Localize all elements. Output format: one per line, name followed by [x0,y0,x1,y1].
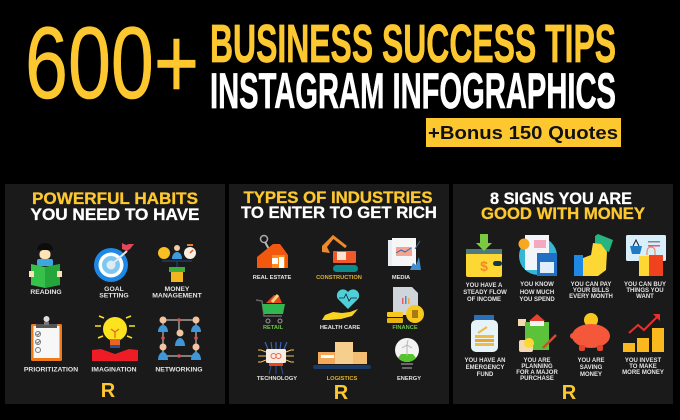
logo R: R [334,382,349,404]
label: pay your bills: YOUR BILLS [573,288,609,294]
panel 2 heading [241,189,437,222]
label: construction: CONSTRUCTION [316,275,362,281]
label: steady flow of income: YOU HAVE A [466,283,503,289]
label: goal setting [99,286,129,300]
icon: goal target [94,243,134,282]
label: real estate: REAL ESTATE [253,275,291,281]
label: goal setting: SETTING [99,292,129,300]
icon: investing bars [623,314,664,352]
icon: real estate [257,236,288,268]
icon: money management [158,244,196,282]
label: know how much you spend: YOU SPEND [519,297,555,303]
icon: technology [258,342,294,374]
label: planning major purchase: YOU ARE [523,358,551,364]
label: buy things you want: YOU CAN BUY [624,282,666,288]
label: money management: MANAGEMENT [152,292,203,300]
panel: types of industries [229,184,449,404]
panel 3 heading: 8 SIGNS YOU ARE [490,190,632,208]
label: saving money: SAVING [580,365,603,371]
icon: logistics boxes [313,342,371,369]
label: technology: TECHNOLOGY [257,376,297,382]
label: imagination: IMAGINATION [91,366,137,374]
panel 1 heading: POWERFUL HABITS [32,190,198,208]
panel 2 heading: TO ENTER TO GET RICH [241,204,437,222]
label: know how much you spend: YOU KNOW [520,282,554,288]
label: planning major purchase: PLANNING [521,364,553,370]
icon: online shopping [626,235,666,276]
label: energy: ENERGY [397,376,421,382]
label: planning major purchase: PURCHASE [520,376,554,382]
icon: construction excavator [322,236,358,272]
panel 3 heading: GOOD WITH MONEY [481,205,645,223]
label: steady flow of income: OF INCOME [467,297,501,303]
label: invest more money: YOU INVEST [625,358,662,364]
icon: finance [387,287,424,323]
label: know how much you spend [519,282,555,303]
icon: major purchase plan [518,314,556,352]
icon: retail cart [256,295,285,323]
icon: wallet [466,234,502,277]
logo R: R [562,382,577,404]
icon: hand with cash [574,234,613,276]
icon: reading [29,243,62,288]
label: steady flow of income: STEADY FLOW [463,290,507,296]
label: buy things you want [624,282,666,300]
panel 1 heading: YOU NEED TO HAVE [30,206,200,224]
label: networking: NETWORKING [155,366,203,374]
label: saving money: MONEY [580,372,602,378]
icon: bills and calculator [518,235,557,276]
icon: health care [322,289,359,320]
label: emergency fund: EMERGENCY [466,365,504,371]
label: money management: MONEY [165,286,190,293]
label: retail: RETAIL [263,325,284,331]
icon: wallet: $ [480,258,488,274]
bonus badge [426,118,621,147]
label: planning major purchase [516,358,558,382]
label: finance: FINANCE [392,325,418,331]
label: saving money [577,358,605,378]
panel 3 heading [481,190,645,223]
big number 600+: 600+ [25,6,199,120]
panel 1 heading [30,190,200,224]
panel: signs good with money [453,184,673,404]
panel: powerful habits [5,184,225,404]
icon: energy bulb [395,338,419,369]
label: goal setting: GOAL [104,286,124,293]
label: invest more money: TO MAKE [629,364,657,370]
label: prioritization: PRIORITIZATION [24,366,78,374]
label: pay your bills: EVERY MONTH [569,294,613,300]
label: emergency fund: YOU HAVE AN [464,358,506,364]
label: saving money: YOU ARE [577,358,605,364]
label: pay your bills [569,282,613,300]
label: invest more money [622,358,664,376]
icon: piggy bank [570,313,610,351]
icon: imagination bulb [92,316,138,361]
icon: media newspaper [388,238,421,270]
label: steady flow of income [463,283,507,303]
label: emergency fund: FUND [477,372,494,378]
panel 2 heading: TYPES OF INDUSTRIES [244,189,432,207]
icon: emergency fund jar [471,315,498,352]
label: money management [152,286,203,300]
label: pay your bills: YOU CAN PAY [571,282,611,288]
label: invest more money: MORE MONEY [622,370,664,376]
label: buy things you want: WANT [636,294,654,300]
label: planning major purchase: FOR A MAJOR [516,370,558,376]
label: know how much you spend: HOW MUCH [520,290,554,296]
logo R: R [101,380,116,402]
label: emergency fund [464,358,506,378]
label: reading: READING [30,289,62,296]
icon: networking [158,316,201,360]
label: media: MEDIA [392,275,410,281]
bonus badge: +Bonus 150 Quotes [428,123,618,143]
icon: prioritization clipboard [31,316,62,361]
label: buy things you want: THINGS YOU [626,288,664,294]
label: health care: HEALTH CARE [320,325,360,331]
label: logistics: LOGISTICS [327,376,358,382]
